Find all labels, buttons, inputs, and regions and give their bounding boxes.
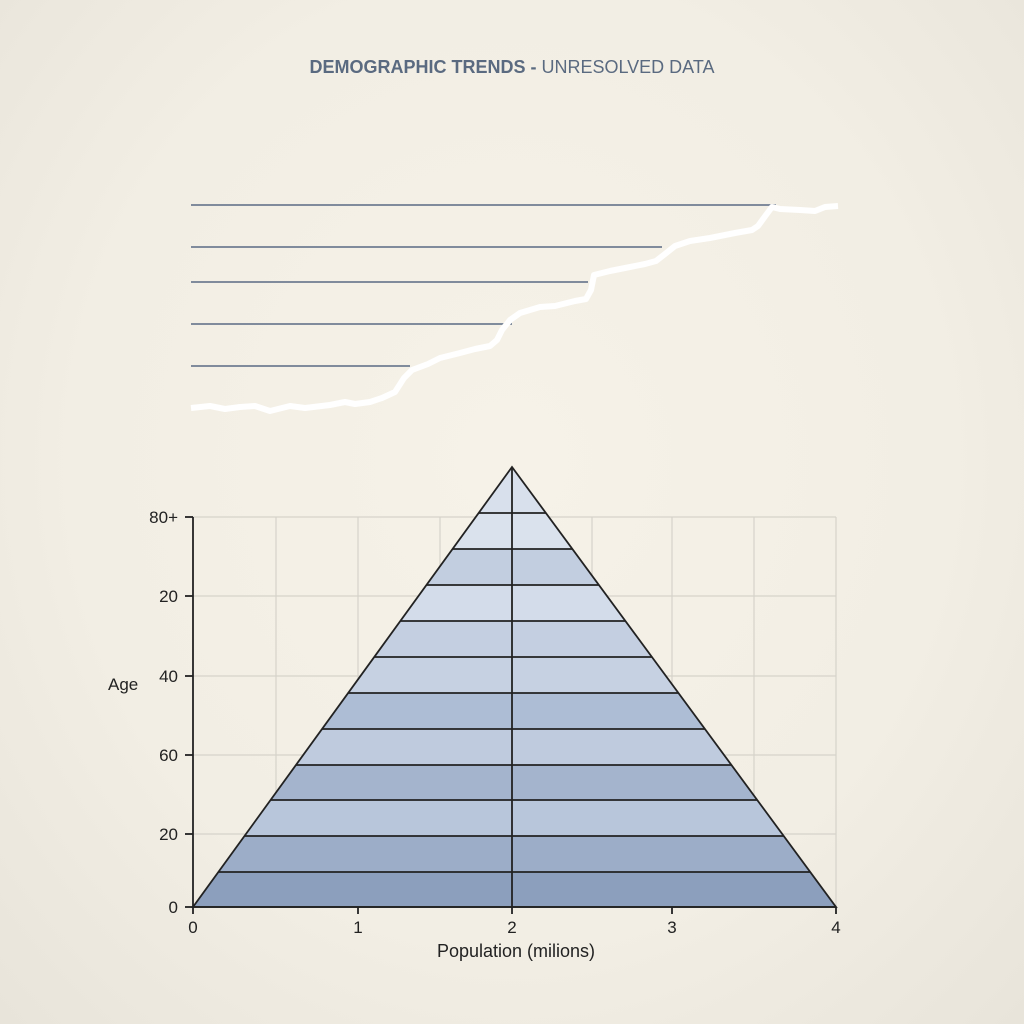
axis labels: Population (milions) [437,941,595,961]
axis labels: 20 [159,587,178,606]
axis labels: 1 [353,918,363,937]
axis labels: 2 [507,918,517,937]
axis labels: 80+ [149,508,178,527]
axis labels: 0 [169,898,178,917]
axis labels: 4 [831,918,841,937]
axis labels [108,508,841,961]
axis labels: 20 [159,825,178,844]
axis labels: 3 [667,918,677,937]
axis labels: 60 [159,746,178,765]
axis labels: Age [108,675,138,694]
chart: population pyramid [108,466,840,961]
axis labels: 0 [188,918,198,937]
axes [185,517,836,914]
axis labels: 40 [159,667,178,686]
pyramid bands [190,460,840,907]
title: DEMOGRAPHIC TRENDS - UNRESOLVED DATA [309,57,715,77]
